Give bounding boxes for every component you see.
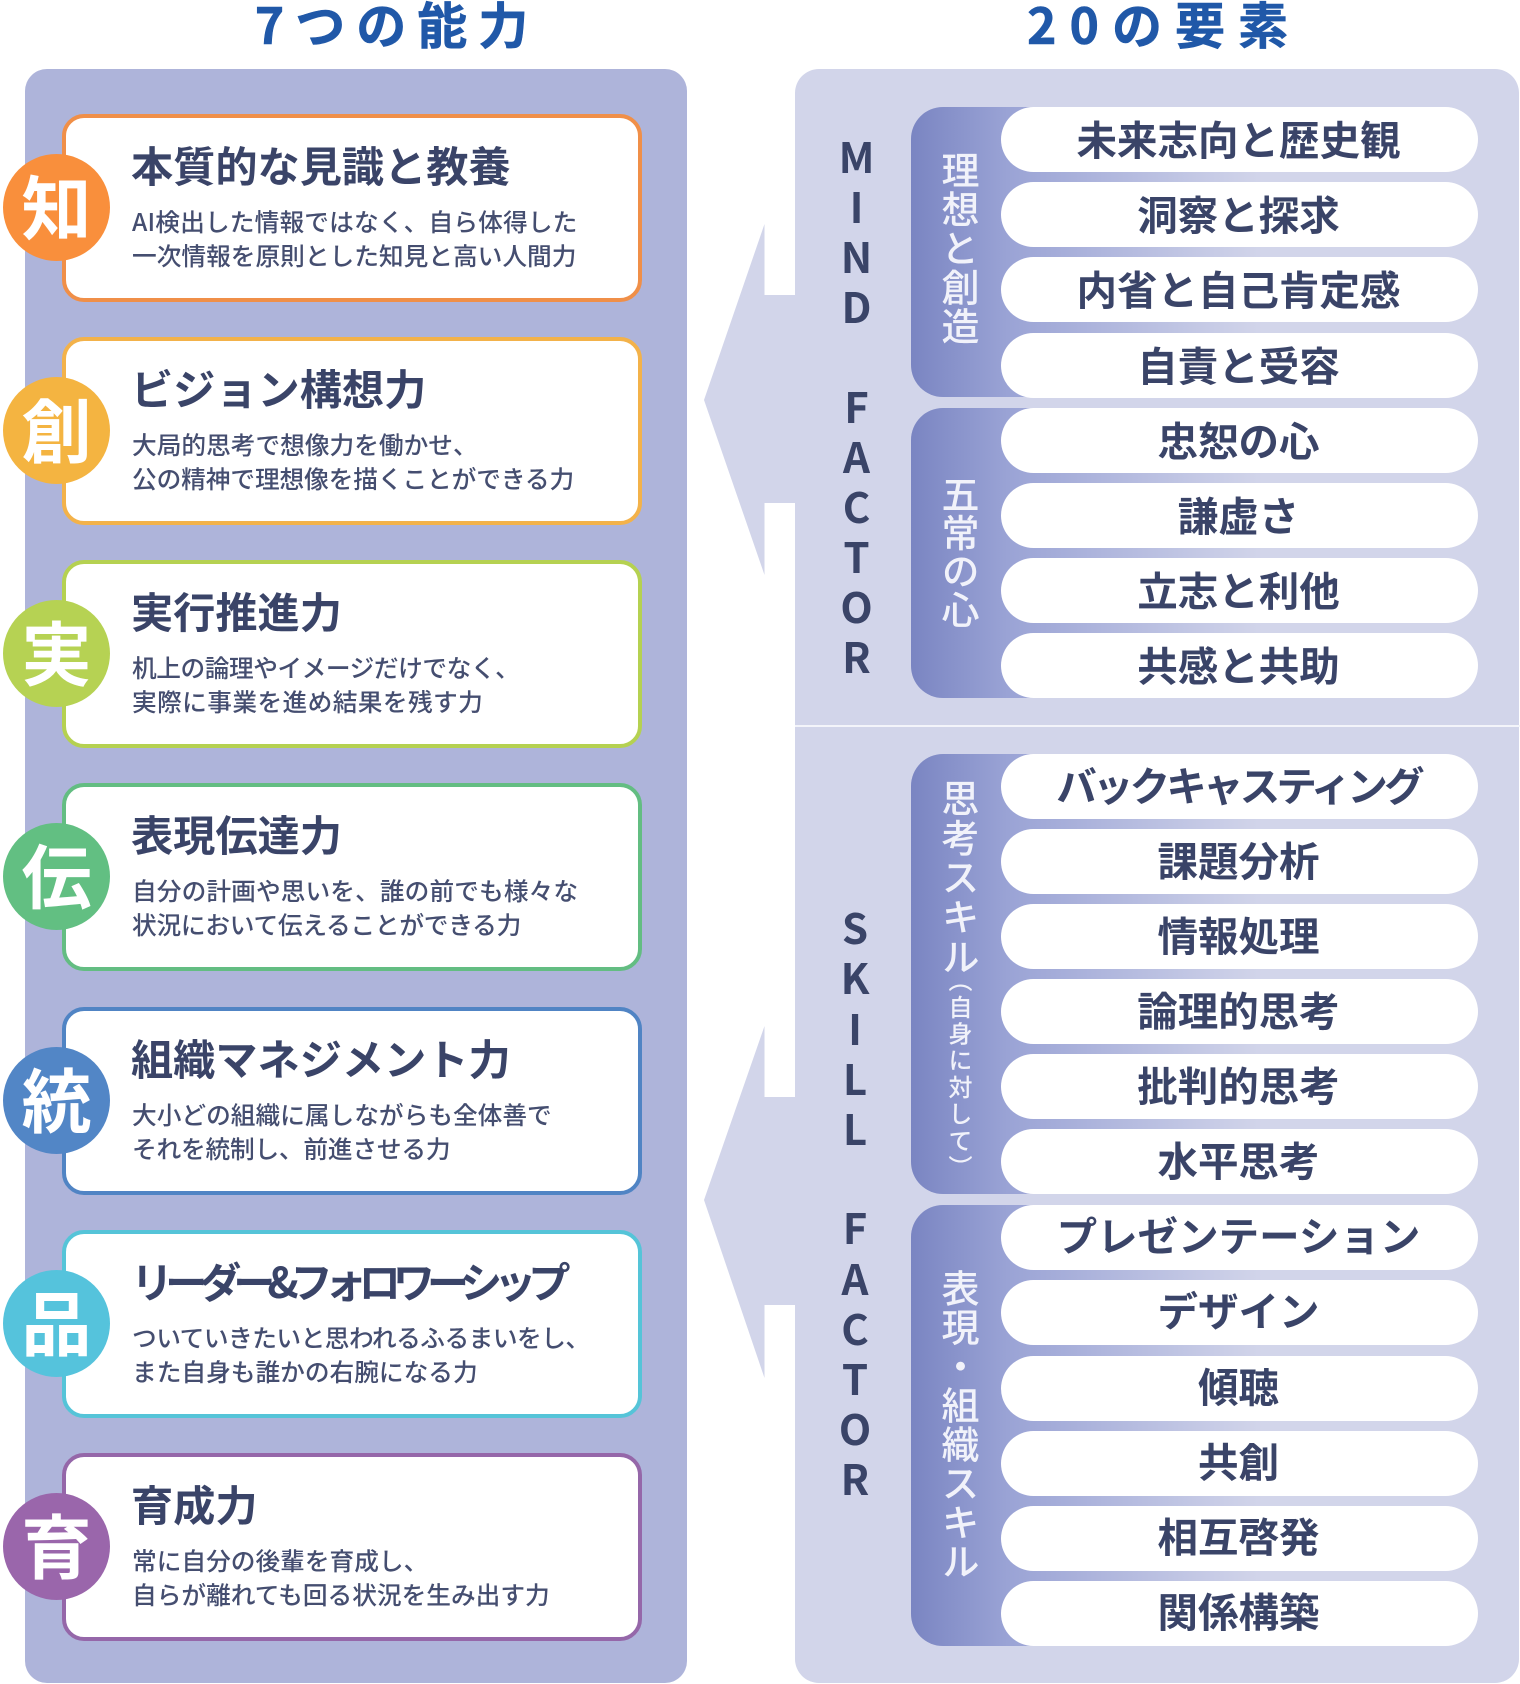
icon: 創: 創: [22, 376, 92, 478]
card: 実 実行推進力: [3, 560, 642, 748]
element pill: 情報処理: [1001, 904, 1478, 969]
card description: 状況において伝えることができる力: [132, 906, 521, 942]
element pill: 共創: [1001, 1431, 1478, 1496]
element pill: バックキャスティング: [1001, 754, 1478, 819]
card title: 実行推進力: [131, 580, 342, 640]
card title: 表現伝達力: [131, 802, 342, 864]
card description: [132, 648, 519, 719]
card frame: [62, 336, 642, 524]
card title: リーダー&フォロワーシップ: [131, 1250, 562, 1311]
group: 思考スキル background: [911, 754, 1478, 1194]
card frame: [62, 560, 642, 748]
element pill: 忠恕の心: [1001, 408, 1478, 473]
label: MIND FACTOR: C: [843, 475, 870, 536]
card description: 自分の計画や思いを、誰の前でも様々な: [132, 872, 578, 908]
label: MIND FACTOR: N: [841, 225, 872, 286]
element pill: 立志と利他: [1001, 558, 1478, 623]
element pill: 謙虚さ: 謙虚さ: [1178, 484, 1299, 543]
element pill: 課題分析: 課題分析: [1158, 829, 1320, 888]
element pill: 自責と受容: 自責と受容: [1137, 334, 1340, 392]
element pill: 傾聴: 傾聴: [1198, 1355, 1279, 1414]
element pill: 内省と自己肯定感: 内省と自己肯定感: [1076, 258, 1400, 317]
card description: [132, 1319, 590, 1389]
element pill: 関係構築: [1001, 1581, 1478, 1646]
card frame: [62, 1007, 642, 1195]
icon: 伝: [3, 822, 110, 930]
panel: 20の要素 background: [795, 69, 1519, 1683]
card frame: [62, 114, 642, 302]
label: MIND FACTOR: [839, 125, 874, 686]
icon: 創: [3, 376, 110, 484]
label: MIND FACTOR: R: [842, 625, 871, 686]
element pill: 傾聴: [1001, 1356, 1478, 1421]
element pill: 洞察と探求: [1001, 182, 1478, 247]
card description: また自身も誰かの右腕になる力: [132, 1353, 478, 1389]
card description: それを統制し、前進させる力: [132, 1130, 450, 1166]
group: 五常の心 background: [911, 408, 1478, 698]
element pill: バックキャスティング: バックキャスティング: [1056, 754, 1421, 813]
icon: 実: [3, 600, 110, 706]
element pill: デザイン: [1001, 1280, 1478, 1345]
element pill: 未来志向と歴史観: 未来志向と歴史観: [1076, 108, 1400, 167]
card frame: [62, 1453, 642, 1641]
arrow: mind factor: [704, 224, 796, 575]
element pill: プレゼンテーション: [1001, 1205, 1478, 1270]
group label: 理想と創造: 理想と創造: [933, 151, 988, 346]
label: MIND FACTOR: T: [843, 525, 870, 586]
element pill: 関係構築: 関係構築: [1158, 1580, 1320, 1639]
card: 伝 表現伝達力: [3, 783, 642, 971]
icon: 品: [3, 1270, 110, 1377]
label: SKILL FACTOR: C: [841, 1297, 869, 1358]
icon: 育: [3, 1493, 110, 1600]
card: 品 リーダー&フォロワーシップ: [3, 1230, 642, 1418]
card title: 本質的な見識と教養: [131, 134, 511, 194]
element pill: 批判的思考: 批判的思考: [1137, 1054, 1340, 1113]
element pill: 水平思考: 水平思考: [1158, 1129, 1320, 1188]
icon: 統: [3, 1047, 110, 1154]
label: SKILL FACTOR: K: [841, 946, 870, 1007]
element pill: 未来志向と歴史観: [1001, 107, 1478, 172]
card: 創 ビジョン構想力: [3, 337, 642, 525]
icon: 統: 統: [22, 1047, 92, 1148]
card description: [132, 202, 578, 273]
group label: 五常の心: 五常の心: [933, 475, 988, 629]
card description: [132, 426, 574, 496]
label: SKILL FACTOR: O: [839, 1397, 871, 1458]
label: MIND FACTOR: I: [850, 175, 863, 236]
icon: 知: 知: [22, 154, 92, 254]
card description: 机上の論理やイメージだけでなく、: [132, 648, 519, 684]
card description: 一次情報を原則とした知見と高い人間力: [132, 237, 576, 273]
element pill: 忠恕の心: 忠恕の心: [1158, 409, 1320, 468]
group: 表現・組織スキル background: [911, 1205, 1478, 1646]
card: 統 組織マネジメント力: [3, 1007, 642, 1195]
element pill: 洞察と探求: 洞察と探求: [1137, 183, 1340, 242]
element pill: 批判的思考: [1001, 1054, 1478, 1119]
element pill: デザイン: デザイン: [1158, 1279, 1320, 1338]
card description: 大局的思考で想像力を働かせ、: [132, 426, 478, 462]
element pill: プレゼンテーション: プレゼンテーション: [1057, 1204, 1420, 1263]
label: MIND FACTOR: F: [844, 375, 869, 436]
element pill: 立志と利他: 立志と利他: [1137, 559, 1340, 618]
card title: 育成力: [131, 1473, 258, 1534]
card frame: [62, 782, 642, 970]
icon: 伝: 伝: [22, 822, 92, 924]
label: SKILL FACTOR: I: [848, 997, 862, 1058]
label: MIND FACTOR: A: [842, 425, 871, 486]
element pill: 共感と共助: [1001, 633, 1478, 698]
label: SKILL FACTOR: R: [841, 1447, 869, 1508]
label: MIND FACTOR: O: [840, 575, 873, 636]
icon: 知: [3, 154, 110, 260]
element pill: 論理的思考: 論理的思考: [1137, 979, 1340, 1038]
element pill: 水平思考: [1001, 1129, 1478, 1194]
card description: 常に自分の後輩を育成し、: [132, 1542, 428, 1578]
element pill: 内省と自己肯定感: [1001, 257, 1478, 322]
element pill: 自責と受容: [1001, 332, 1478, 398]
element pill: 情報処理: 情報処理: [1158, 904, 1320, 963]
element pill: 共創: 共創: [1198, 1430, 1279, 1489]
card title: 組織マネジメント力: [131, 1027, 511, 1088]
panel: 7つの能力 background: [25, 69, 687, 1683]
label: SKILL FACTOR: L: [843, 1097, 867, 1158]
label: SKILL FACTOR: [839, 896, 871, 1508]
element pill: 相互啓発: 相互啓発: [1158, 1505, 1320, 1564]
element pill: 相互啓発: [1001, 1506, 1478, 1571]
card description: 公の精神で理想像を描くことができる力: [132, 460, 574, 496]
label: SKILL FACTOR: S: [842, 896, 868, 957]
card description: 実際に事業を進め結果を残す力: [132, 683, 483, 719]
label: MIND FACTOR: M: [839, 125, 874, 186]
card description: ついていきたいと思われるふるまいをし、: [132, 1319, 590, 1355]
label: SKILL FACTOR: A: [841, 1247, 870, 1308]
divider: [795, 725, 1520, 727]
card description: AI検出した情報ではなく、自ら体得した: [132, 202, 578, 238]
label: SKILL FACTOR: L: [843, 1047, 867, 1108]
label: MIND FACTOR: D: [842, 275, 872, 336]
element pill: 共感と共助: 共感と共助: [1137, 634, 1340, 693]
card: 知 本質的な見識と教養: [3, 114, 642, 302]
card title: ビジョン構想力: [131, 356, 426, 418]
card description: [132, 1542, 550, 1612]
card description: 自らが離れても回る状況を生み出す力: [132, 1576, 550, 1612]
icon: 品: 品: [22, 1270, 92, 1371]
element pill: 謙虚さ: [1001, 483, 1478, 548]
card description: [132, 1096, 552, 1166]
element pill: 論理的思考: [1001, 979, 1478, 1044]
label: SKILL FACTOR: T: [842, 1347, 868, 1408]
card frame: [62, 1230, 642, 1418]
icon: 実: 実: [22, 600, 92, 700]
icon: 育: 育: [22, 1493, 92, 1594]
label: SKILL FACTOR: F: [843, 1196, 867, 1257]
group: 理想と創造 background: [911, 107, 1478, 397]
group label: 思考スキル（自身に対して）: 思考スキル（自身に対して）: [933, 779, 988, 1182]
card description: [132, 872, 578, 942]
group label: 表現・組織スキル: 表現・組織スキル: [933, 1269, 988, 1581]
card description: 大小どの組織に属しながらも全体善で: [132, 1096, 552, 1132]
element pill: 課題分析: [1001, 829, 1478, 894]
card: 育 育成力: [3, 1453, 642, 1641]
arrow: skill factor: [704, 1026, 796, 1378]
